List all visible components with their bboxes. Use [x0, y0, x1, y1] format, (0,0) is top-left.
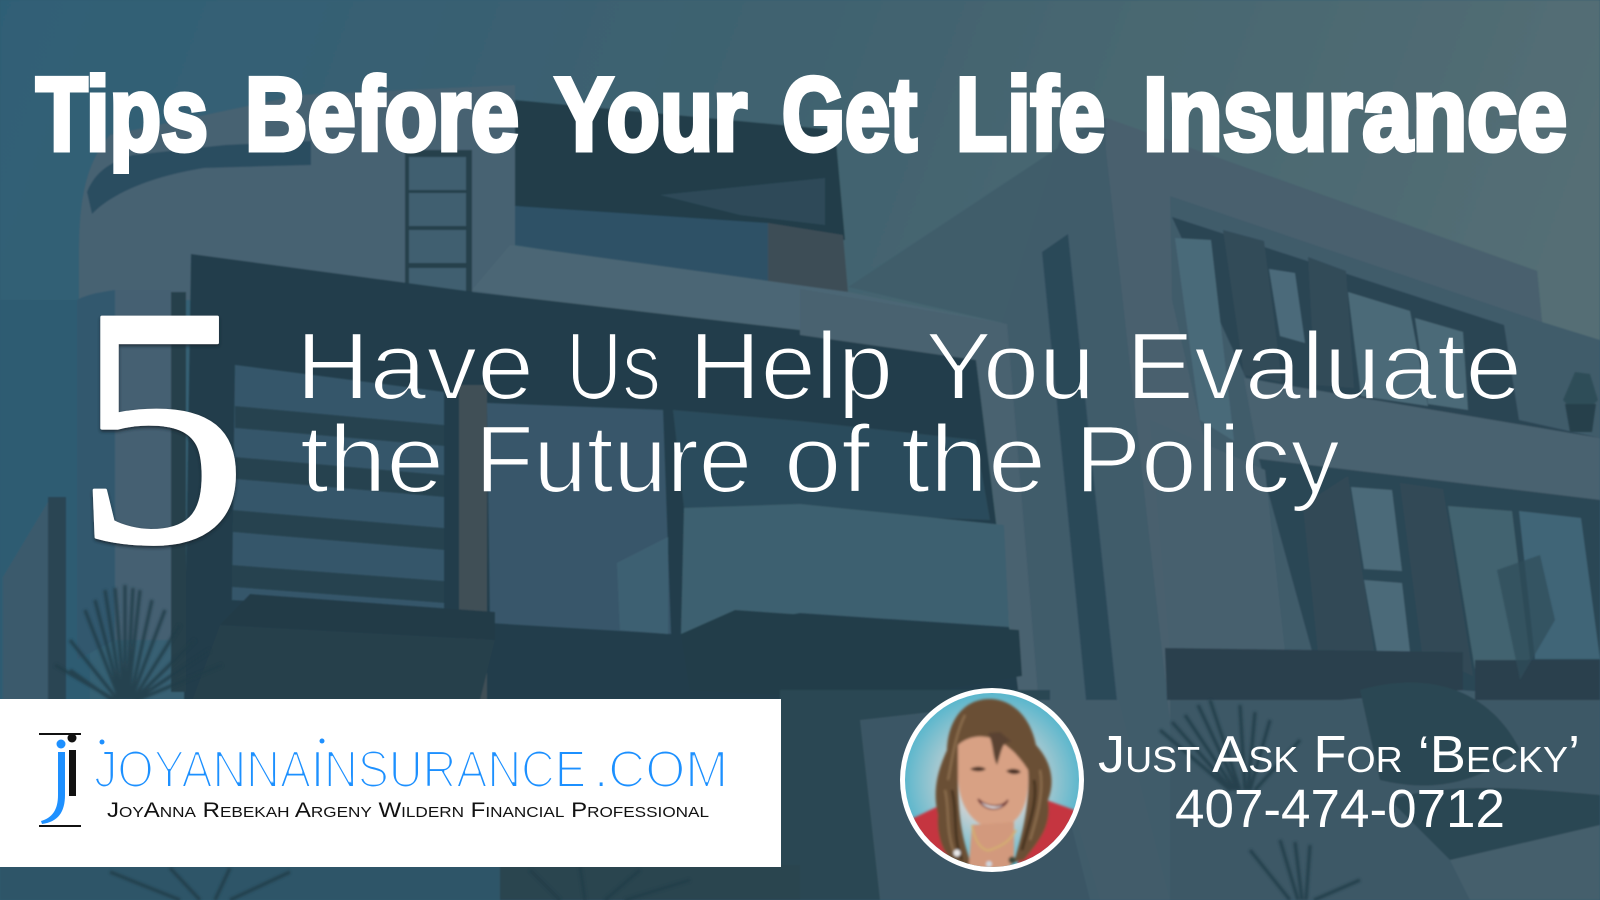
subtitle: tip text: Future — [475, 406, 752, 513]
title: Tips — [36, 57, 208, 173]
title: Before — [245, 57, 519, 173]
title: Your — [555, 57, 747, 173]
subtitle: tip text: Evaluate — [1126, 313, 1522, 420]
title: Life — [956, 57, 1105, 173]
subtitle: tip text: Policy — [1075, 406, 1340, 513]
numeral five: 5 — [74, 236, 248, 615]
subtitle: tip text: Have — [296, 313, 534, 420]
subtitle: tip text: Help — [689, 313, 893, 420]
website name: JOYANNAINSURANCE — [94, 741, 586, 799]
potted plant — [1497, 372, 1598, 680]
icon: ji monogram — [39, 733, 81, 827]
website name: .COM — [594, 741, 728, 799]
title: Get — [782, 57, 917, 173]
subtitle: tip text: the — [300, 406, 444, 513]
tagline: JoyAnna Rebekah Argeny Wildern Financial Professional — [107, 799, 709, 822]
subtitle: tip text: You — [925, 313, 1095, 420]
subtitle: tip text: of — [784, 406, 870, 513]
contact: just ask for Becky: Just Ask For ‘Becky’ — [1098, 726, 1580, 784]
plants — [55, 585, 1360, 900]
panel: logo banner — [0, 699, 781, 867]
subtitle: tip text: the — [901, 406, 1046, 513]
subtitle: tip text: Us — [566, 313, 661, 420]
portrait photo — [900, 688, 1084, 872]
contact: just ask for Becky: 407-474-0712 — [1175, 779, 1505, 839]
